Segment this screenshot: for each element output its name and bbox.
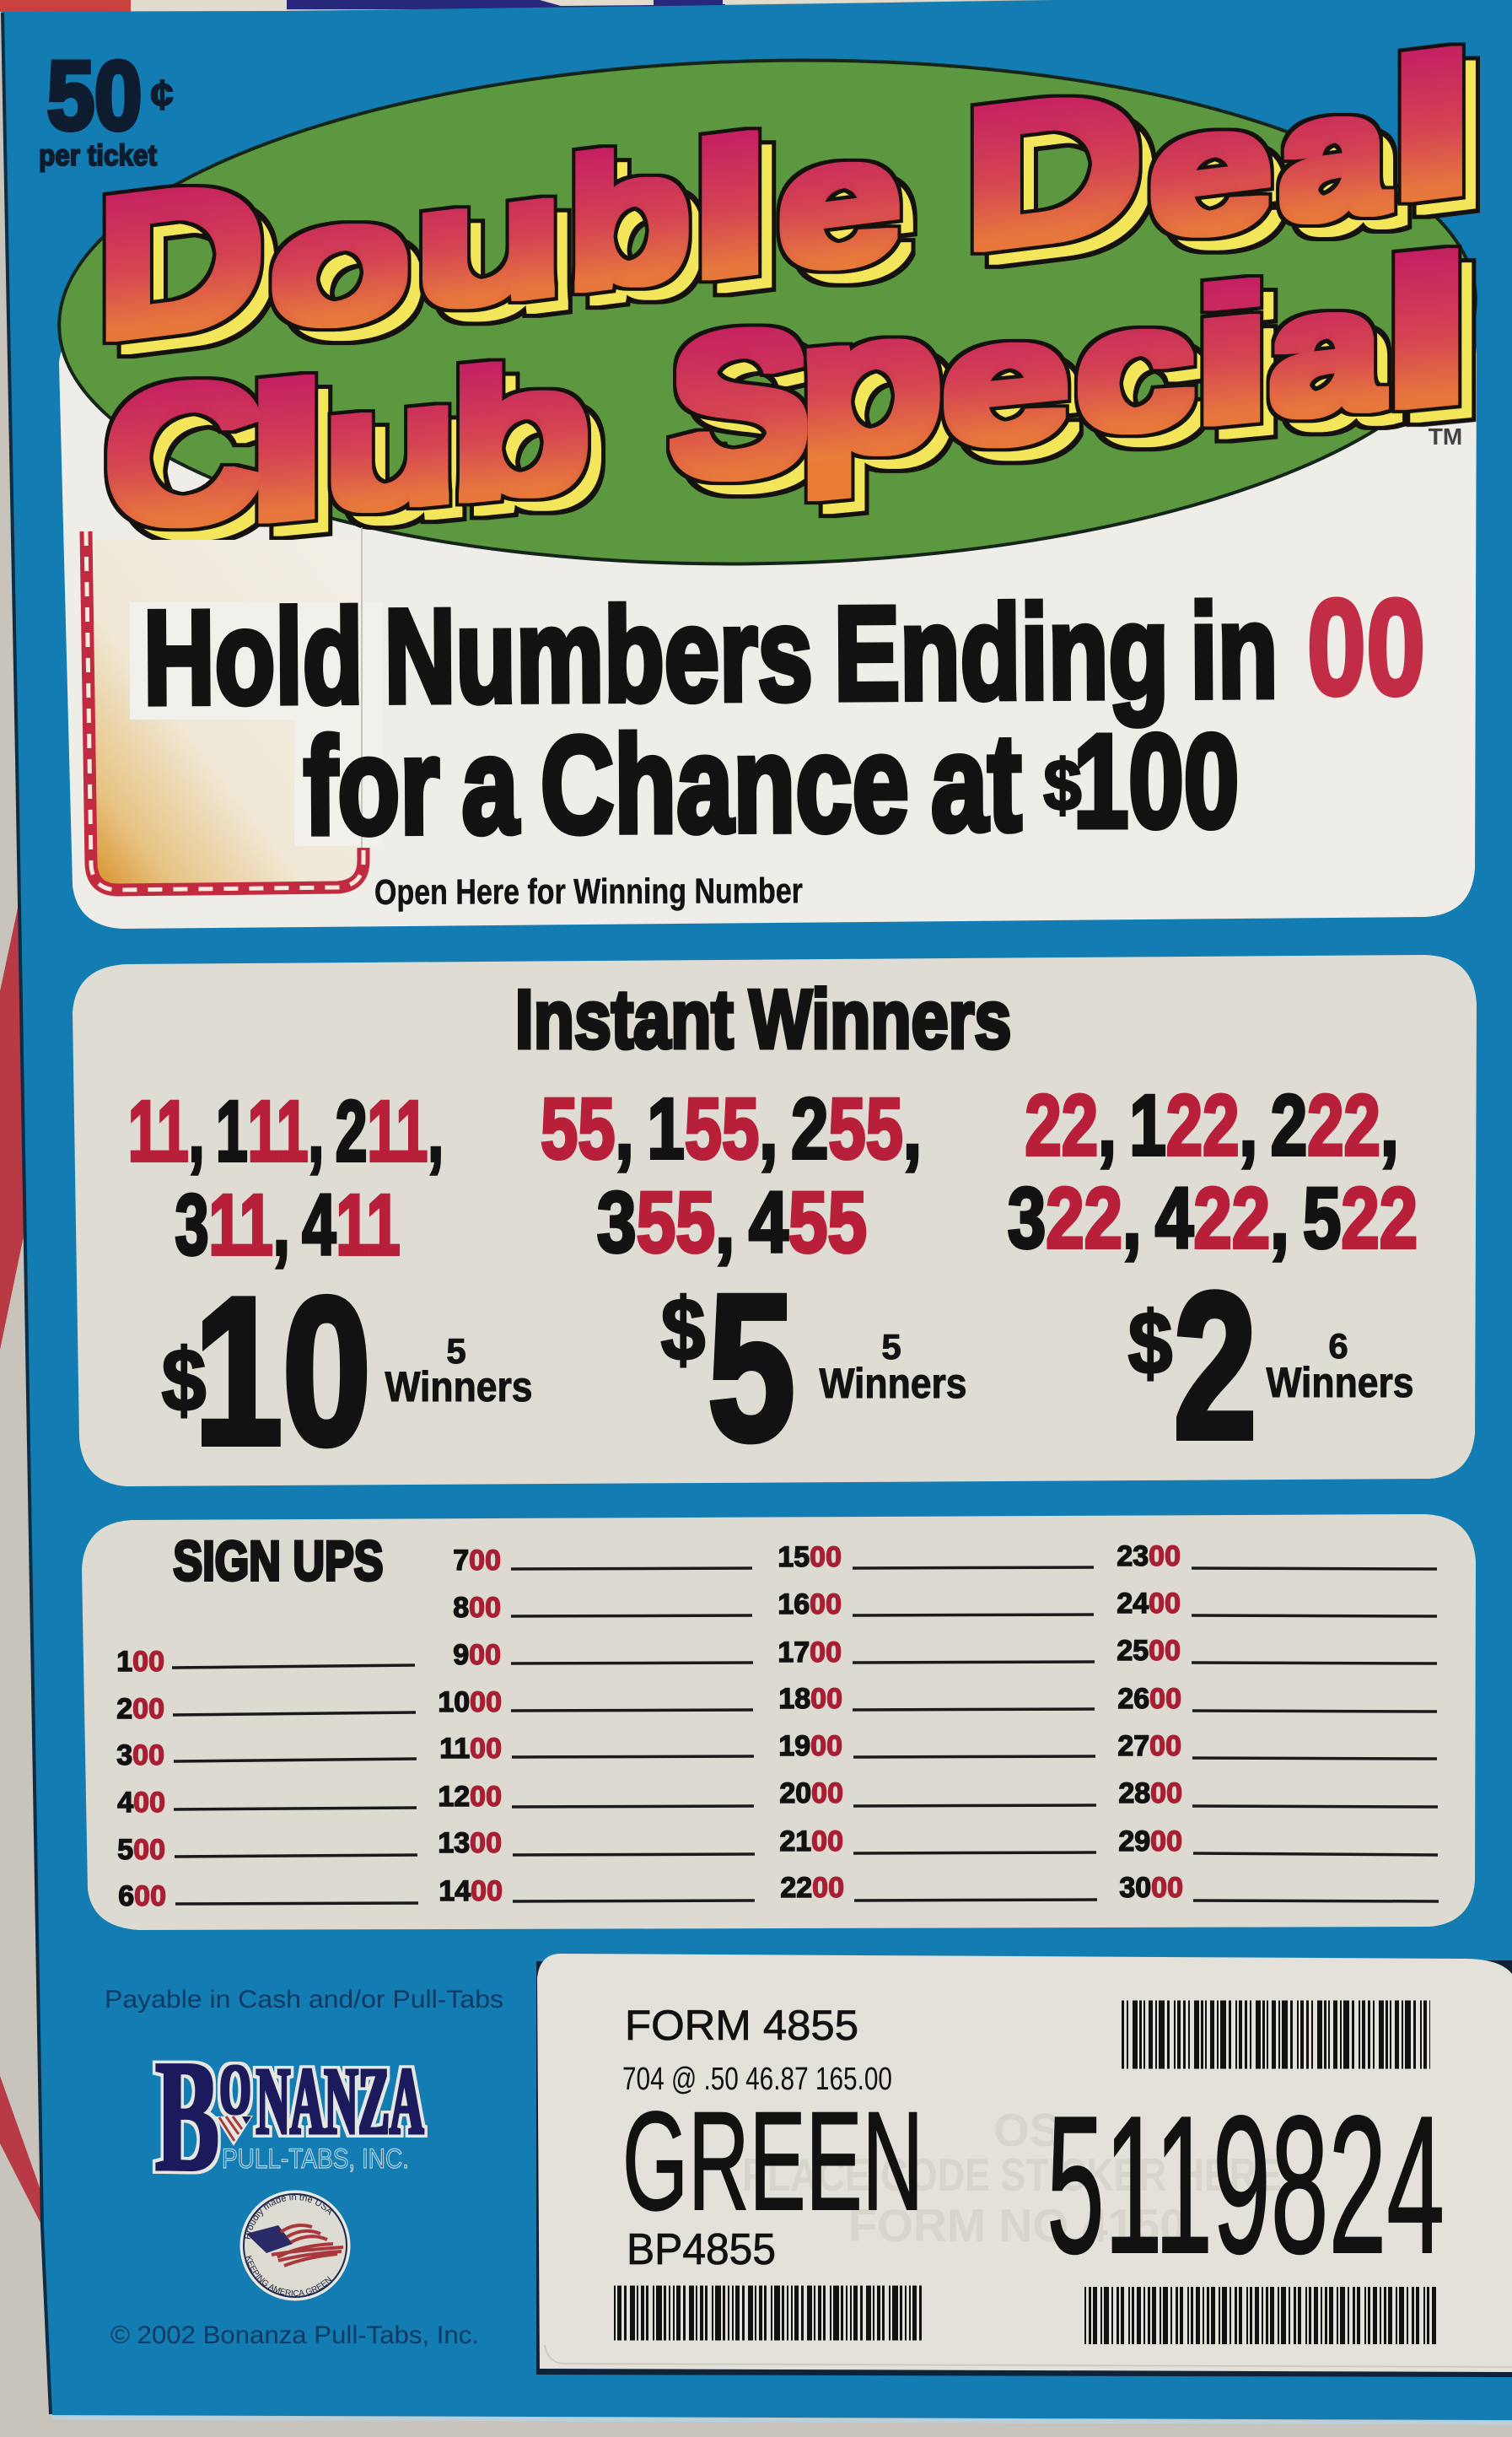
title: Double Deal Club Special: i <box>1185 247 1279 463</box>
sign up column 4: 2600 <box>1117 1683 1181 1715</box>
sign up column 1: 300 <box>116 1739 164 1771</box>
ghost print-through text <box>742 2104 1282 2251</box>
sign up column 4 <box>1117 1540 1439 1904</box>
sign up column 2: 1200 <box>438 1781 502 1813</box>
prize: $2, 6 winners: 2 <box>1174 1250 1256 1482</box>
price: 50 cents per ticket: per ticket <box>39 140 157 172</box>
numbers: $5 group: 55, 155, 255, <box>541 1081 922 1177</box>
label sticker <box>536 1954 1512 2377</box>
prize: $10, 5 winners: 10 <box>194 1254 371 1488</box>
headline: Hold Numbers Ending in 00: 00 <box>1307 570 1425 724</box>
numbers: $10 group: 11, 111, 211, <box>128 1084 444 1179</box>
barcode: bottom left <box>614 2286 923 2340</box>
prize: $5, 5 winners: 5 <box>881 1327 901 1367</box>
panel: instant winners <box>73 955 1477 1488</box>
numbers: $5 group: 355, 455 <box>597 1173 867 1270</box>
sign up column 2: 1000 <box>438 1686 502 1718</box>
sign up column 4: 2300 <box>1117 1540 1181 1572</box>
card left edge shadow <box>3 13 51 2414</box>
sign up column 3: 1600 <box>778 1588 842 1620</box>
numbers: $10 group: 311, 411 <box>175 1177 401 1273</box>
title: Double Deal Club Special: a <box>1278 52 1389 259</box>
sign up column 3 <box>778 1541 1097 1904</box>
pricing line: 704 @ .50 46.87 165.00 <box>622 2062 892 2097</box>
open here caption: Open Here for Winning Number <box>374 871 803 913</box>
sign up column 4: 2800 <box>1118 1777 1182 1809</box>
prize: $10, 5 winners: 5 <box>446 1331 466 1371</box>
prize: $2, 6 winners: $ <box>1128 1294 1172 1393</box>
sign up column 2: 800 <box>453 1592 501 1624</box>
sign up column 3: 1500 <box>778 1541 842 1573</box>
title: Double Deal Club Special: D <box>962 50 1144 291</box>
card bottom highlight <box>52 2418 1512 2423</box>
title: Double Deal Club Special: a <box>1268 249 1384 453</box>
prize: $2, 6 winners: Winners <box>1266 1360 1414 1407</box>
trademark: TM <box>1429 423 1462 450</box>
prize: $5, 5 winners: Winners <box>819 1361 967 1408</box>
title: Double Deal Club Special: p <box>795 267 945 500</box>
title: Double Deal Club Special: u <box>322 345 459 547</box>
title: Double Deal Club Special: e <box>1147 67 1273 275</box>
sign up column 2: 1100 <box>439 1733 502 1765</box>
sign up column 3: 2200 <box>780 1872 844 1904</box>
logo: Bonanza Pull-Tabs: PULL-TABS, INC. <box>222 2143 409 2174</box>
sign up column 1 <box>116 1646 418 1912</box>
sign up column 1: 600 <box>118 1880 166 1912</box>
numbers: $2 group: 22, 122, 222, <box>1025 1078 1399 1173</box>
sign up column 4: 2900 <box>1118 1825 1182 1857</box>
heading: instant winners: Instant Winners <box>515 973 1011 1065</box>
sign up column 2: 1400 <box>439 1875 503 1907</box>
ghost print-through text: PLACE CODE STICKER HERE <box>742 2149 1282 2201</box>
headline: for a Chance at $100: for a Chance at <box>304 706 1022 863</box>
prize: $10, 5 winners <box>162 1254 533 1488</box>
title: Double Deal Club Special: l <box>239 344 334 560</box>
sign up column 4: 2700 <box>1117 1730 1181 1762</box>
title: Double Deal Club Special: C <box>103 338 263 570</box>
seal: made in the USA: Proudly made in the USA <box>244 2193 332 2239</box>
prize: $10, 5 winners: $ <box>162 1331 206 1430</box>
panel: sign ups <box>82 1514 1476 1930</box>
sign up column 3: 2000 <box>779 1777 843 1809</box>
prize: $10, 5 winners: Winners <box>385 1364 533 1411</box>
barcode: top right <box>1122 2001 1430 2068</box>
ghost print-through text: FORM NO 4150 <box>848 2199 1186 2251</box>
price: 50 cents per ticket <box>39 41 174 172</box>
sign up column 3: 1800 <box>778 1683 842 1715</box>
seal: made in the USA <box>239 2190 351 2301</box>
title: Double Deal Club Special: D <box>95 138 266 380</box>
BP code: BP4855 <box>627 2225 776 2274</box>
logo: Bonanza Pull-Tabs: NANZA <box>256 2049 423 2154</box>
prize: $5, 5 winners: 5 <box>708 1253 795 1484</box>
title: Double Deal Club Special: u <box>412 137 567 345</box>
sign up column 1: 500 <box>117 1834 165 1866</box>
sign up column 2: 900 <box>453 1639 501 1671</box>
tear-open window <box>86 527 383 890</box>
prize: $2, 6 winners: 6 <box>1328 1326 1348 1366</box>
ghost print-through text: OS <box>993 2104 1060 2156</box>
numbers: $2 group: 322, 422, 522 <box>1008 1169 1418 1266</box>
title: Double Deal Club Special: l <box>1380 13 1483 241</box>
prize: $2, 6 winners <box>1128 1250 1414 1482</box>
headline: for a Chance at $100: $ <box>1044 745 1081 825</box>
sign up column 1: 400 <box>117 1787 165 1819</box>
prize: $5, 5 winners <box>661 1253 967 1484</box>
heading: sign ups: SIGN UPS <box>173 1529 384 1592</box>
sign up column 2: 1300 <box>438 1827 502 1859</box>
numbers: $2 group <box>1008 1078 1418 1266</box>
title: Double Deal Club Special: l <box>683 99 778 318</box>
sign up column 4: 2500 <box>1117 1635 1181 1667</box>
numbers: $5 group <box>541 1081 922 1270</box>
sign up column 2 <box>438 1545 755 1907</box>
headline: for a Chance at $100: 100 <box>1073 708 1239 855</box>
prize: $5, 5 winners: $ <box>661 1281 705 1379</box>
title: Double Deal Club Special: e <box>776 96 902 309</box>
title: Double Deal Club Special: e <box>939 279 1071 485</box>
title: Double Deal Club Special: l <box>1373 214 1481 451</box>
sign up column 1: 100 <box>116 1646 164 1678</box>
price: 50 cents per ticket: 50 <box>47 41 142 149</box>
title: Double Deal Club Special <box>95 13 1483 570</box>
headline: Hold Numbers Ending in 00: Hold Numbers Ending in <box>143 577 1278 732</box>
title: Double Deal Club Special: o <box>267 159 412 365</box>
seal: made in the USA: KEEPING AMERICA GREEN <box>246 2256 332 2296</box>
title: Double Deal Club Special: S <box>669 284 810 525</box>
numbers: $10 group <box>128 1084 444 1273</box>
copyright: © 2002 Bonanza Pull-Tabs, Inc. <box>110 2321 479 2349</box>
sign up column 3: 1700 <box>778 1636 842 1669</box>
price: 50 cents per ticket: ¢ <box>150 71 174 118</box>
sign up column 2: 700 <box>453 1545 501 1577</box>
barcode: bottom right <box>1084 2287 1439 2344</box>
green ellipse <box>54 46 1481 579</box>
sign up column 1: 200 <box>116 1693 164 1725</box>
sign up column 3: 1900 <box>778 1730 842 1762</box>
sign up column 3: 2100 <box>779 1825 843 1857</box>
sign up column 4: 3000 <box>1119 1872 1183 1904</box>
logo: Bonanza Pull-Tabs: B <box>155 2026 219 2204</box>
logo: Bonanza Pull-Tabs: O <box>219 2050 251 2129</box>
title: Double Deal Club Special: b <box>448 325 593 537</box>
title: Double Deal Club Special: c <box>1074 265 1196 471</box>
colour name: GREEN <box>622 2084 923 2240</box>
payable note: Payable in Cash and/or Pull-Tabs <box>105 1986 503 2014</box>
title: Double Deal Club Special: b <box>566 111 692 329</box>
logo: Bonanza Pull-Tabs <box>155 2026 423 2204</box>
sign up column 4: 2400 <box>1117 1588 1181 1620</box>
panel: top white panel <box>59 333 1477 929</box>
form number: FORM 4855 <box>625 2002 858 2049</box>
